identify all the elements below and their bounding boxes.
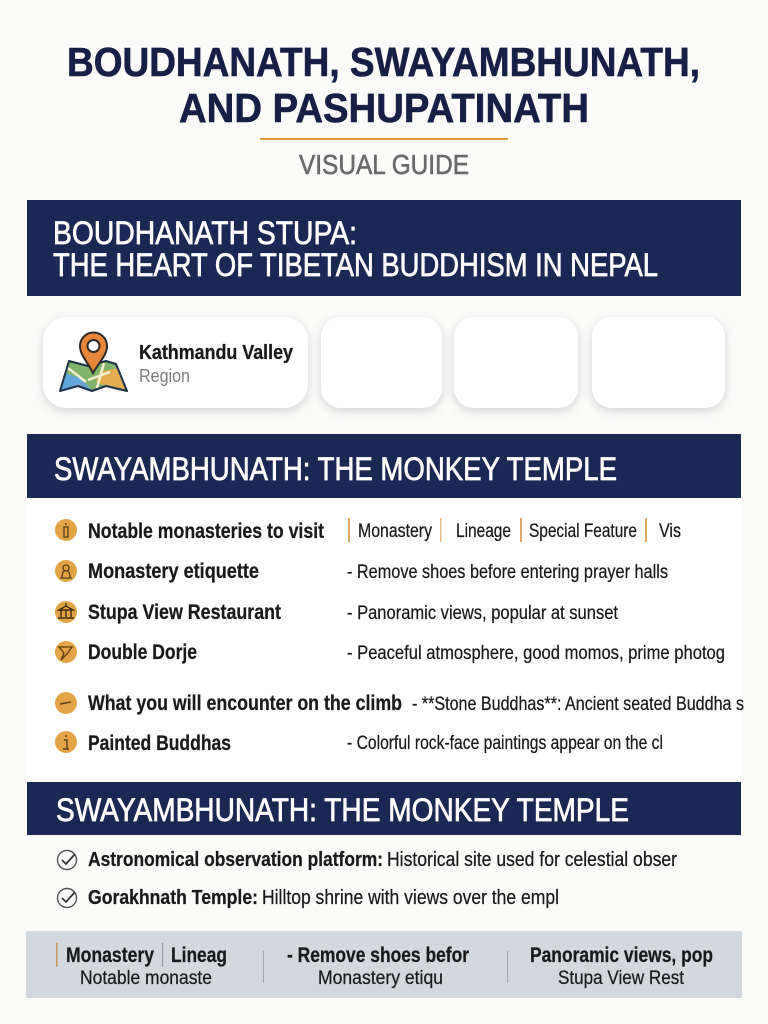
card label: Region bbox=[139, 366, 190, 386]
footer column 3: Panoramic views, pop bbox=[530, 944, 713, 967]
panel: second Swayambhunath heading band: SWAYAMBHUNATH: THE MONKEY TEMPLE bbox=[56, 792, 629, 828]
row: stupa view restaurant bbox=[55, 601, 619, 624]
check item: astronomical platform: Astronomical observation platform: bbox=[88, 849, 383, 871]
title bbox=[67, 39, 700, 131]
row: notable monasteries: Notable monasteries to visit bbox=[88, 520, 324, 543]
footer column 1: Notable monaste bbox=[80, 968, 212, 989]
checklist bbox=[58, 849, 677, 909]
panel: list rows bbox=[27, 498, 744, 780]
row: double dorje: - Peaceful atmosphere, good momos, prime photog bbox=[347, 643, 725, 664]
footer column 1 bbox=[56, 943, 227, 989]
row: painted buddhas bbox=[55, 731, 663, 755]
check item: Gorakhnath temple: Hilltop shrine with views over the empl bbox=[262, 887, 559, 909]
icon: map pin bbox=[60, 332, 127, 391]
card label bbox=[139, 342, 294, 386]
row: double dorje bbox=[55, 641, 725, 664]
footer column 1: Lineag bbox=[171, 944, 227, 967]
panel: empty card 4 bbox=[592, 317, 725, 408]
panel: empty card 2 bbox=[321, 317, 442, 408]
check item: Gorakhnath temple: Gorakhnath Temple: bbox=[88, 887, 258, 909]
title: BOUDHANATH, SWAYAMBHUNATH, bbox=[67, 39, 700, 85]
panel: empty card 3 bbox=[454, 317, 578, 408]
card label: Kathmandu Valley bbox=[139, 342, 294, 364]
row: monastery etiquette bbox=[55, 560, 668, 583]
row: painted buddhas: Painted Buddhas bbox=[88, 732, 231, 755]
panel: Boudhanath heading band: BOUDHANATH STUPA: bbox=[53, 215, 357, 251]
footer column 1: Monastery bbox=[66, 944, 154, 967]
row: notable monasteries: Lineage bbox=[456, 521, 511, 542]
panel: Boudhanath heading band bbox=[27, 200, 741, 296]
panel: region card bbox=[43, 317, 308, 408]
panel: Boudhanath heading band: THE HEART OF TIBETAN BUDDHISM IN NEPAL bbox=[53, 247, 658, 283]
panel: Swayambhunath heading band: SWAYAMBHUNATH: THE MONKEY TEMPLE bbox=[54, 451, 617, 487]
row: monastery etiquette: - Remove shoes before entering prayer halls bbox=[347, 562, 668, 583]
footer column 3: Stupa View Rest bbox=[558, 968, 685, 989]
row: notable monasteries: Special Feature bbox=[529, 521, 637, 542]
check item: astronomical platform: Historical site used for celestial obser bbox=[387, 849, 677, 871]
check item: astronomical platform bbox=[58, 849, 677, 871]
panel: second Swayambhunath heading band bbox=[27, 782, 741, 835]
row: notable monasteries: Monastery bbox=[358, 521, 432, 542]
title: AND PASHUPATINATH bbox=[179, 85, 589, 131]
row: painted buddhas: - Colorful rock-face paintings appear on the cl bbox=[347, 733, 663, 754]
row: notable monasteries bbox=[55, 518, 681, 543]
footer column 2: Monastery etiqu bbox=[318, 968, 443, 989]
check item: Gorakhnath temple bbox=[58, 887, 559, 909]
row: climb: What you will encounter on the climb bbox=[88, 692, 402, 715]
row: double dorje: Double Dorje bbox=[88, 641, 197, 664]
row: stupa view restaurant: Stupa View Restaurant bbox=[88, 601, 281, 624]
panel: Swayambhunath heading band bbox=[27, 434, 741, 498]
footer column 2 bbox=[287, 944, 469, 989]
row: stupa view restaurant: - Panoramic views, popular at sunset bbox=[347, 603, 619, 624]
row: monastery etiquette: Monastery etiquette bbox=[88, 560, 259, 583]
panel: footer summary strip bbox=[26, 931, 742, 998]
subtitle: VISUAL GUIDE bbox=[299, 149, 469, 180]
row: climb bbox=[55, 692, 744, 715]
footer column 2: - Remove shoes befor bbox=[287, 944, 469, 967]
row: notable monasteries: Vis bbox=[659, 521, 681, 542]
footer column 3 bbox=[530, 944, 713, 989]
